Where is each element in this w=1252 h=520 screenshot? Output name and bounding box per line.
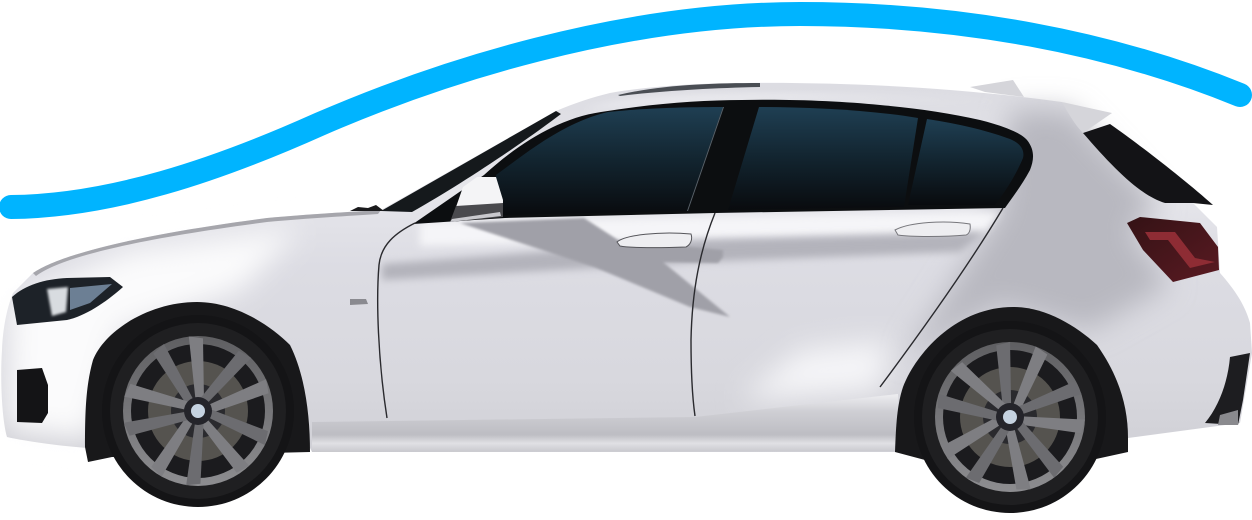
rear window: [1083, 124, 1213, 205]
wiper: [350, 205, 384, 211]
door top highlight: [420, 212, 1000, 246]
spoiler: [1062, 102, 1112, 133]
fender badge: [350, 299, 368, 305]
door handle rear: [895, 222, 970, 236]
rear side window glass: [908, 119, 1023, 205]
rear wheel: [914, 321, 1106, 513]
B pillar highlight: [687, 107, 724, 211]
door lower highlight: [740, 340, 890, 400]
side sill: [312, 394, 898, 452]
mirror: [450, 177, 503, 222]
rear quarter shading: [905, 110, 1170, 360]
front window glass: [496, 107, 723, 215]
rear wheel arch: [895, 307, 1128, 480]
front wheel arch: [85, 302, 310, 462]
roof highlight: [585, 95, 1040, 110]
taillight: [1127, 217, 1219, 282]
windshield: [381, 111, 561, 212]
front grille: [17, 368, 48, 423]
middle window glass: [728, 107, 918, 210]
rear diffuser: [1205, 353, 1250, 425]
front fender highlight: [8, 228, 300, 440]
door grey crease: [382, 232, 985, 280]
door seams: [378, 208, 1003, 418]
headlight: [12, 277, 123, 325]
front wheel: [102, 315, 294, 507]
hood crease line: [33, 210, 381, 276]
door handle front: [617, 233, 692, 248]
door shadow: [460, 218, 730, 317]
roof fin: [970, 80, 1024, 97]
airflow curve: [11, 14, 1240, 207]
window frame: [413, 100, 1033, 224]
roof rail: [618, 83, 760, 96]
car body: [1, 83, 1252, 452]
